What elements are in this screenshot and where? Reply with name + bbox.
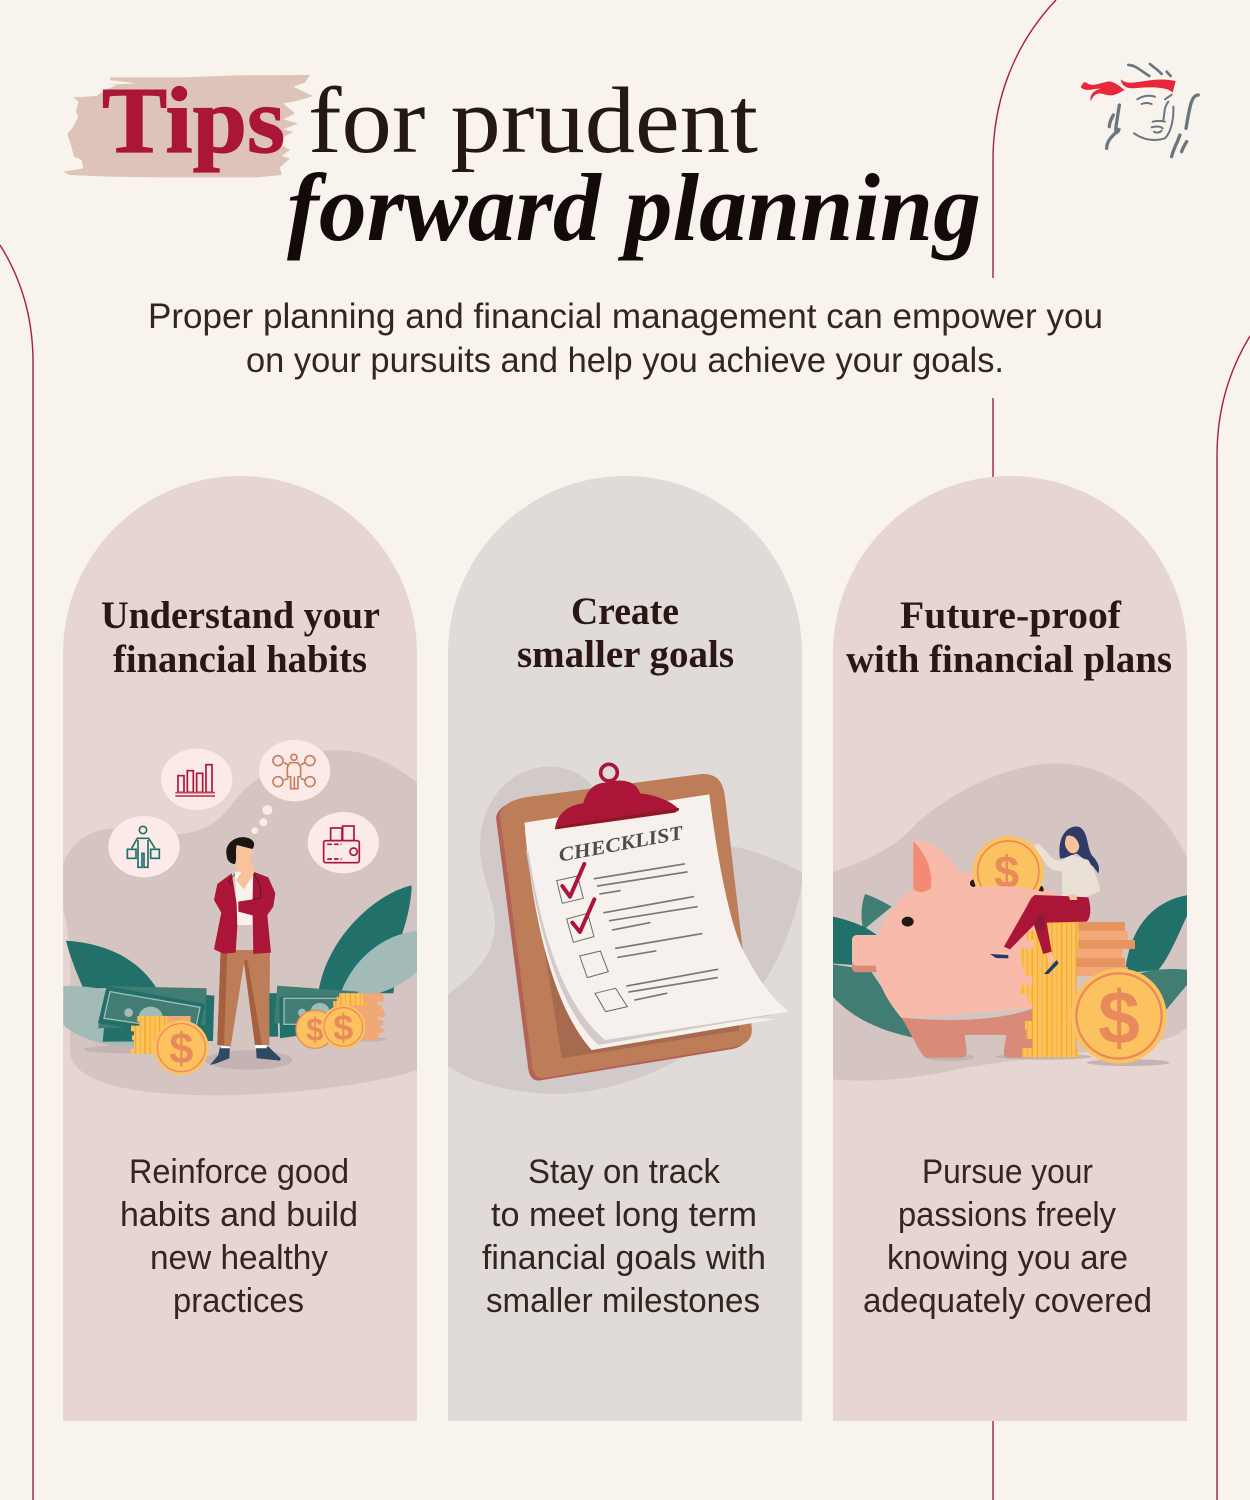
- coins right: [296, 1005, 365, 1049]
- icon: person and money bubble: [259, 740, 330, 801]
- title: [102, 69, 981, 261]
- title: for prudent: [308, 69, 758, 173]
- coin stack: [1020, 922, 1135, 1057]
- illustration: piggy bank and woman: [830, 763, 1188, 1081]
- coin large: [1071, 968, 1167, 1064]
- panel: understand your financial habits: [63, 476, 417, 1421]
- heading: create smaller goals: smaller goals: [517, 633, 734, 676]
- heading: understand your financial habits: [101, 594, 380, 681]
- description: stay on track: to meet long term: [491, 1196, 757, 1234]
- illustration: checklist clipboard: [447, 764, 803, 1094]
- coin left: [154, 1020, 209, 1075]
- woman: [990, 826, 1100, 974]
- description: stay on track: [482, 1153, 766, 1320]
- heading: future-proof: Future-proof: [900, 594, 1122, 637]
- description: stay on track: smaller milestones: [486, 1282, 760, 1320]
- heading: understand your financial habits: Understand your: [101, 594, 380, 637]
- description: reinforce good habits: Reinforce good: [129, 1153, 349, 1191]
- coins right: $: [333, 1007, 353, 1048]
- piggy bank: $: [994, 846, 1019, 897]
- man: [210, 837, 281, 1065]
- thought dots: [251, 805, 272, 834]
- cash stack left: [98, 986, 214, 1042]
- checklist lines: [594, 864, 718, 1000]
- description: reinforce good habits: [120, 1153, 358, 1320]
- panel: future-proof with financial plans: [830, 476, 1188, 1421]
- coin large: $: [1098, 975, 1140, 1059]
- description: reinforce good habits: new healthy: [150, 1239, 328, 1277]
- checklist label: CHECKLIST: [557, 822, 686, 867]
- description: pursue your passions: adequately covered: [863, 1282, 1152, 1320]
- check marks: [562, 864, 594, 932]
- logo: Great Eastern head: [1081, 64, 1198, 157]
- cash stack right: [269, 986, 358, 1038]
- title: forward planning: [287, 154, 981, 261]
- heading: create smaller goals: Create: [571, 590, 679, 633]
- piggy bank: [852, 836, 1063, 1058]
- paper sheets: [524, 794, 789, 1050]
- description: pursue your passions: knowing you are: [887, 1239, 1128, 1277]
- subtitle: Proper planning and financial management can empower you: [148, 297, 1103, 336]
- description: pursue your passions: [863, 1153, 1152, 1320]
- panel: create smaller goals: [447, 476, 803, 1421]
- icon: shopper bubble: [108, 816, 180, 877]
- clipboard board: [496, 774, 752, 1081]
- title: Tips: [102, 69, 285, 173]
- description: stay on track: Stay on track: [528, 1153, 721, 1191]
- description: stay on track: financial goals with: [482, 1239, 766, 1277]
- checkboxes: [557, 876, 627, 1012]
- subtitle: [148, 297, 1103, 380]
- illustration: man thinking about money: [63, 740, 417, 1095]
- description: pursue your passions: passions freely: [898, 1196, 1116, 1234]
- heading: future-proof: with financial plans: [846, 638, 1172, 681]
- heading: create smaller goals: [517, 590, 734, 676]
- description: reinforce good habits: habits and build: [120, 1196, 358, 1234]
- description: pursue your passions: Pursue your: [922, 1153, 1093, 1191]
- coins right: $: [306, 1012, 324, 1048]
- coin stack right: [333, 993, 386, 1042]
- subtitle: on your pursuits and help you achieve your goals.: [246, 341, 1004, 380]
- heading: understand your financial habits: financial habits: [113, 638, 367, 681]
- description: reinforce good habits: practices: [173, 1282, 304, 1320]
- brush stroke behind Tips: [63, 75, 313, 177]
- icon: wallet bubble: [308, 812, 379, 873]
- icon: bar chart bubble: [161, 749, 232, 810]
- heading: future-proof: [846, 594, 1172, 681]
- coin left: $: [169, 1026, 193, 1074]
- coin stack left: [131, 1016, 191, 1054]
- clip: [555, 764, 679, 829]
